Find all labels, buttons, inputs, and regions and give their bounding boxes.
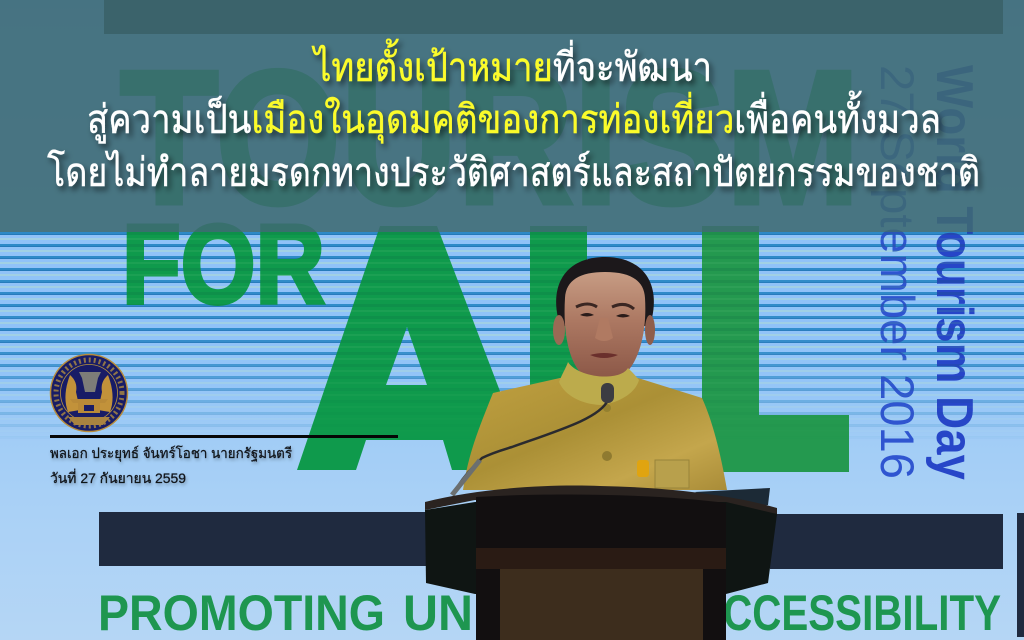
date: วันที่ 27 กันยายน 2559 <box>50 469 186 486</box>
speaker head <box>553 257 655 381</box>
jacket details: buttons, pin, pocket <box>602 404 689 488</box>
title overlay panel <box>0 0 1024 232</box>
screen graphic: tourism for all lettering: TOURISM <box>120 32 860 244</box>
screen graphic: vertical event text <box>871 65 983 480</box>
speaker jacket <box>463 378 727 490</box>
screen graphic: vertical event text: 27 September 2016 <box>871 65 924 479</box>
podium <box>425 486 777 640</box>
signature divider <box>50 435 398 438</box>
screen scan lines over lettering <box>0 232 1024 414</box>
speaker photo <box>452 257 727 495</box>
title line 1: ไทยตั้งเป้าหมายที่จะพัฒนา <box>311 38 712 90</box>
screen graphic: promoting text: UNIVERSAL <box>403 585 683 640</box>
seal emblem <box>50 354 128 432</box>
screen graphic: promoting text: PROMOTING <box>98 585 385 640</box>
screen graphic: vertical event text: World Tourism Day <box>925 65 983 480</box>
screen graphic: tourism for all lettering: FOR <box>122 202 325 327</box>
title text <box>47 38 980 195</box>
screen graphic: promoting text <box>98 585 1001 640</box>
speaker collar <box>559 362 639 405</box>
screen graphic: tourism for all lettering <box>120 32 860 472</box>
screen background <box>0 232 1024 640</box>
title line 2: สู่ความเป็นเมืองในอุดมคติของการท่องเที่ยวเพื่อคนทั้งมวล <box>87 90 941 144</box>
podium tablet <box>695 488 770 510</box>
microphone <box>452 383 614 495</box>
speaker name: พลเอก ประยุทธ์ จันทร์โอชา นายกรัฐมนตรี <box>50 445 292 462</box>
